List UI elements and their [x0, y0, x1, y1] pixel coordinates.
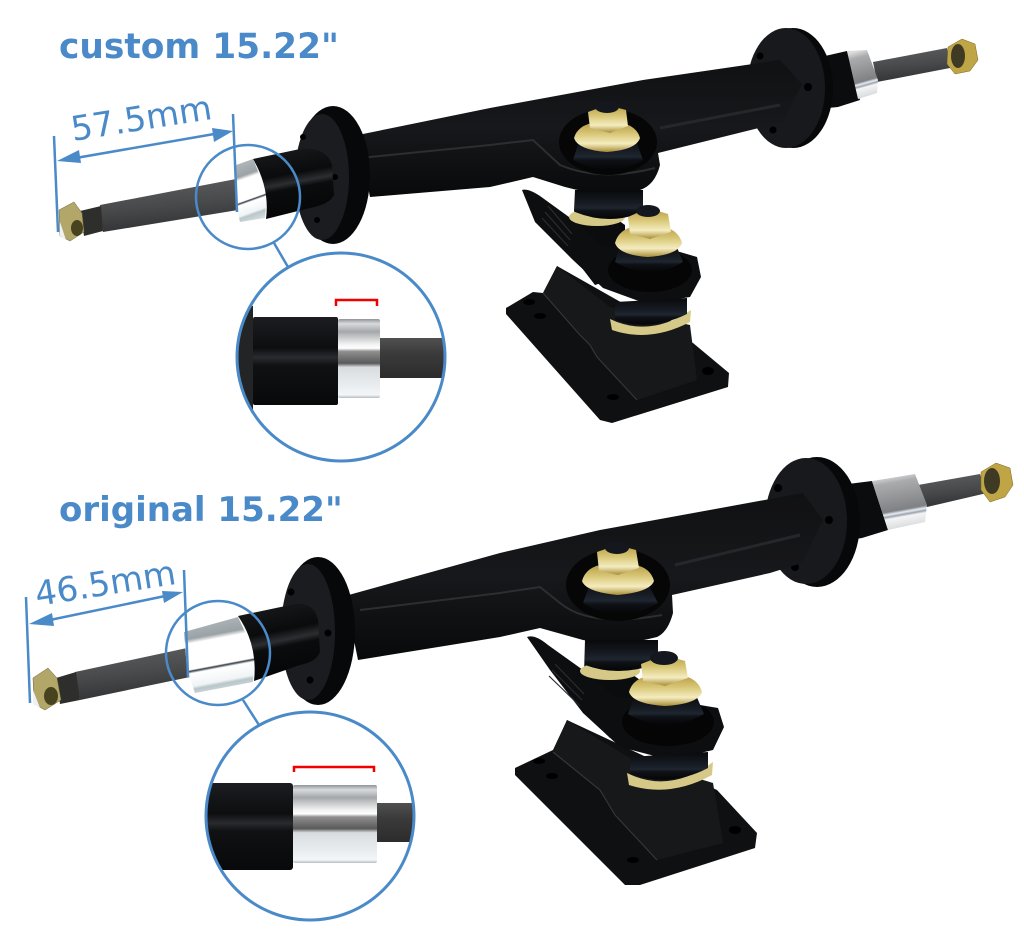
dimension: 57.5mm: 57.5mm	[68, 88, 215, 150]
axle rod right	[873, 48, 950, 82]
callout connector	[243, 700, 259, 725]
second nut	[628, 208, 671, 239]
base lines and holes	[523, 293, 714, 400]
lower gold washer	[627, 762, 713, 790]
upper nut top	[605, 542, 629, 554]
right collar	[825, 51, 860, 108]
hanger	[345, 493, 823, 660]
left spacer	[236, 159, 267, 222]
upper cap washer	[574, 122, 640, 152]
right disc	[747, 28, 833, 148]
axle thread left	[56, 672, 80, 704]
arm ribs	[542, 206, 572, 246]
right disc	[765, 457, 860, 587]
callout: custom detail	[236, 253, 446, 461]
callout connector	[274, 243, 288, 267]
right collar	[848, 481, 888, 540]
upper nut top	[595, 101, 619, 113]
left disc	[295, 106, 370, 244]
upper gold washer lower	[580, 662, 640, 680]
truck: custom	[59, 28, 978, 423]
dimension: 46.5mm	[26, 553, 188, 703]
axle thread left	[80, 206, 103, 236]
left spacer	[184, 617, 255, 693]
hanger right highlight	[675, 535, 800, 565]
upper nut	[597, 545, 639, 575]
axle rod right	[918, 474, 987, 507]
base lines and holes	[533, 752, 741, 863]
red bracket	[294, 767, 374, 772]
right axle nut	[947, 39, 978, 74]
pivot column	[583, 640, 640, 738]
lower arm	[527, 636, 724, 760]
base riser	[553, 720, 723, 860]
upper pivot bushing	[575, 190, 643, 219]
second bushing	[628, 695, 704, 725]
lower arm	[522, 190, 701, 304]
upper pivot bushing	[585, 640, 658, 671]
upper gold washer lower	[569, 208, 625, 226]
title: custom 15.22": custom 15.22"	[59, 27, 339, 67]
lower gold washer	[610, 310, 691, 335]
pivot column	[572, 190, 625, 285]
left cylinder	[238, 604, 320, 681]
baseplate	[506, 266, 729, 423]
right axle nut	[981, 463, 1013, 502]
callout circle: small custom	[196, 145, 300, 249]
second cap washer	[629, 675, 702, 706]
lower arm front bowl	[608, 248, 692, 292]
callout circle: small original	[166, 601, 270, 705]
hanger ledge highlight	[360, 587, 662, 619]
upper bushing	[583, 578, 658, 614]
second nut top	[650, 651, 678, 665]
lower pivot bushing	[630, 752, 708, 780]
bowl recess	[559, 109, 657, 175]
upper bushing	[573, 135, 643, 170]
arm ribs	[549, 664, 584, 706]
left axle nut	[33, 668, 61, 710]
second nut top	[636, 205, 660, 217]
axle rod left	[75, 648, 190, 700]
axle rod left	[100, 179, 238, 232]
callout: original detail	[204, 712, 417, 920]
upper cap washer	[582, 564, 654, 595]
hanger ledge highlight	[360, 140, 655, 174]
hanger	[358, 60, 802, 197]
upper nut	[588, 105, 628, 133]
right spacer	[872, 474, 927, 530]
lower pivot bushing	[615, 298, 687, 325]
hanger right highlight	[660, 105, 780, 128]
dimension: 57.5mm	[54, 88, 237, 232]
second bushing	[615, 245, 683, 272]
baseplate	[515, 720, 757, 885]
truck: original	[33, 457, 1013, 885]
lower arm front bowl	[622, 698, 714, 746]
left cylinder	[253, 149, 334, 219]
dimension: 46.5mm: 46.5mm	[32, 553, 179, 615]
base riser	[543, 266, 697, 400]
left axle nut	[59, 202, 84, 241]
right spacer	[847, 50, 878, 99]
bowl recess	[566, 549, 670, 621]
second cap washer	[615, 226, 682, 257]
red bracket	[336, 300, 377, 306]
left disc	[281, 557, 355, 705]
title: original 15.22": original 15.22"	[59, 490, 343, 530]
second nut	[641, 655, 688, 686]
